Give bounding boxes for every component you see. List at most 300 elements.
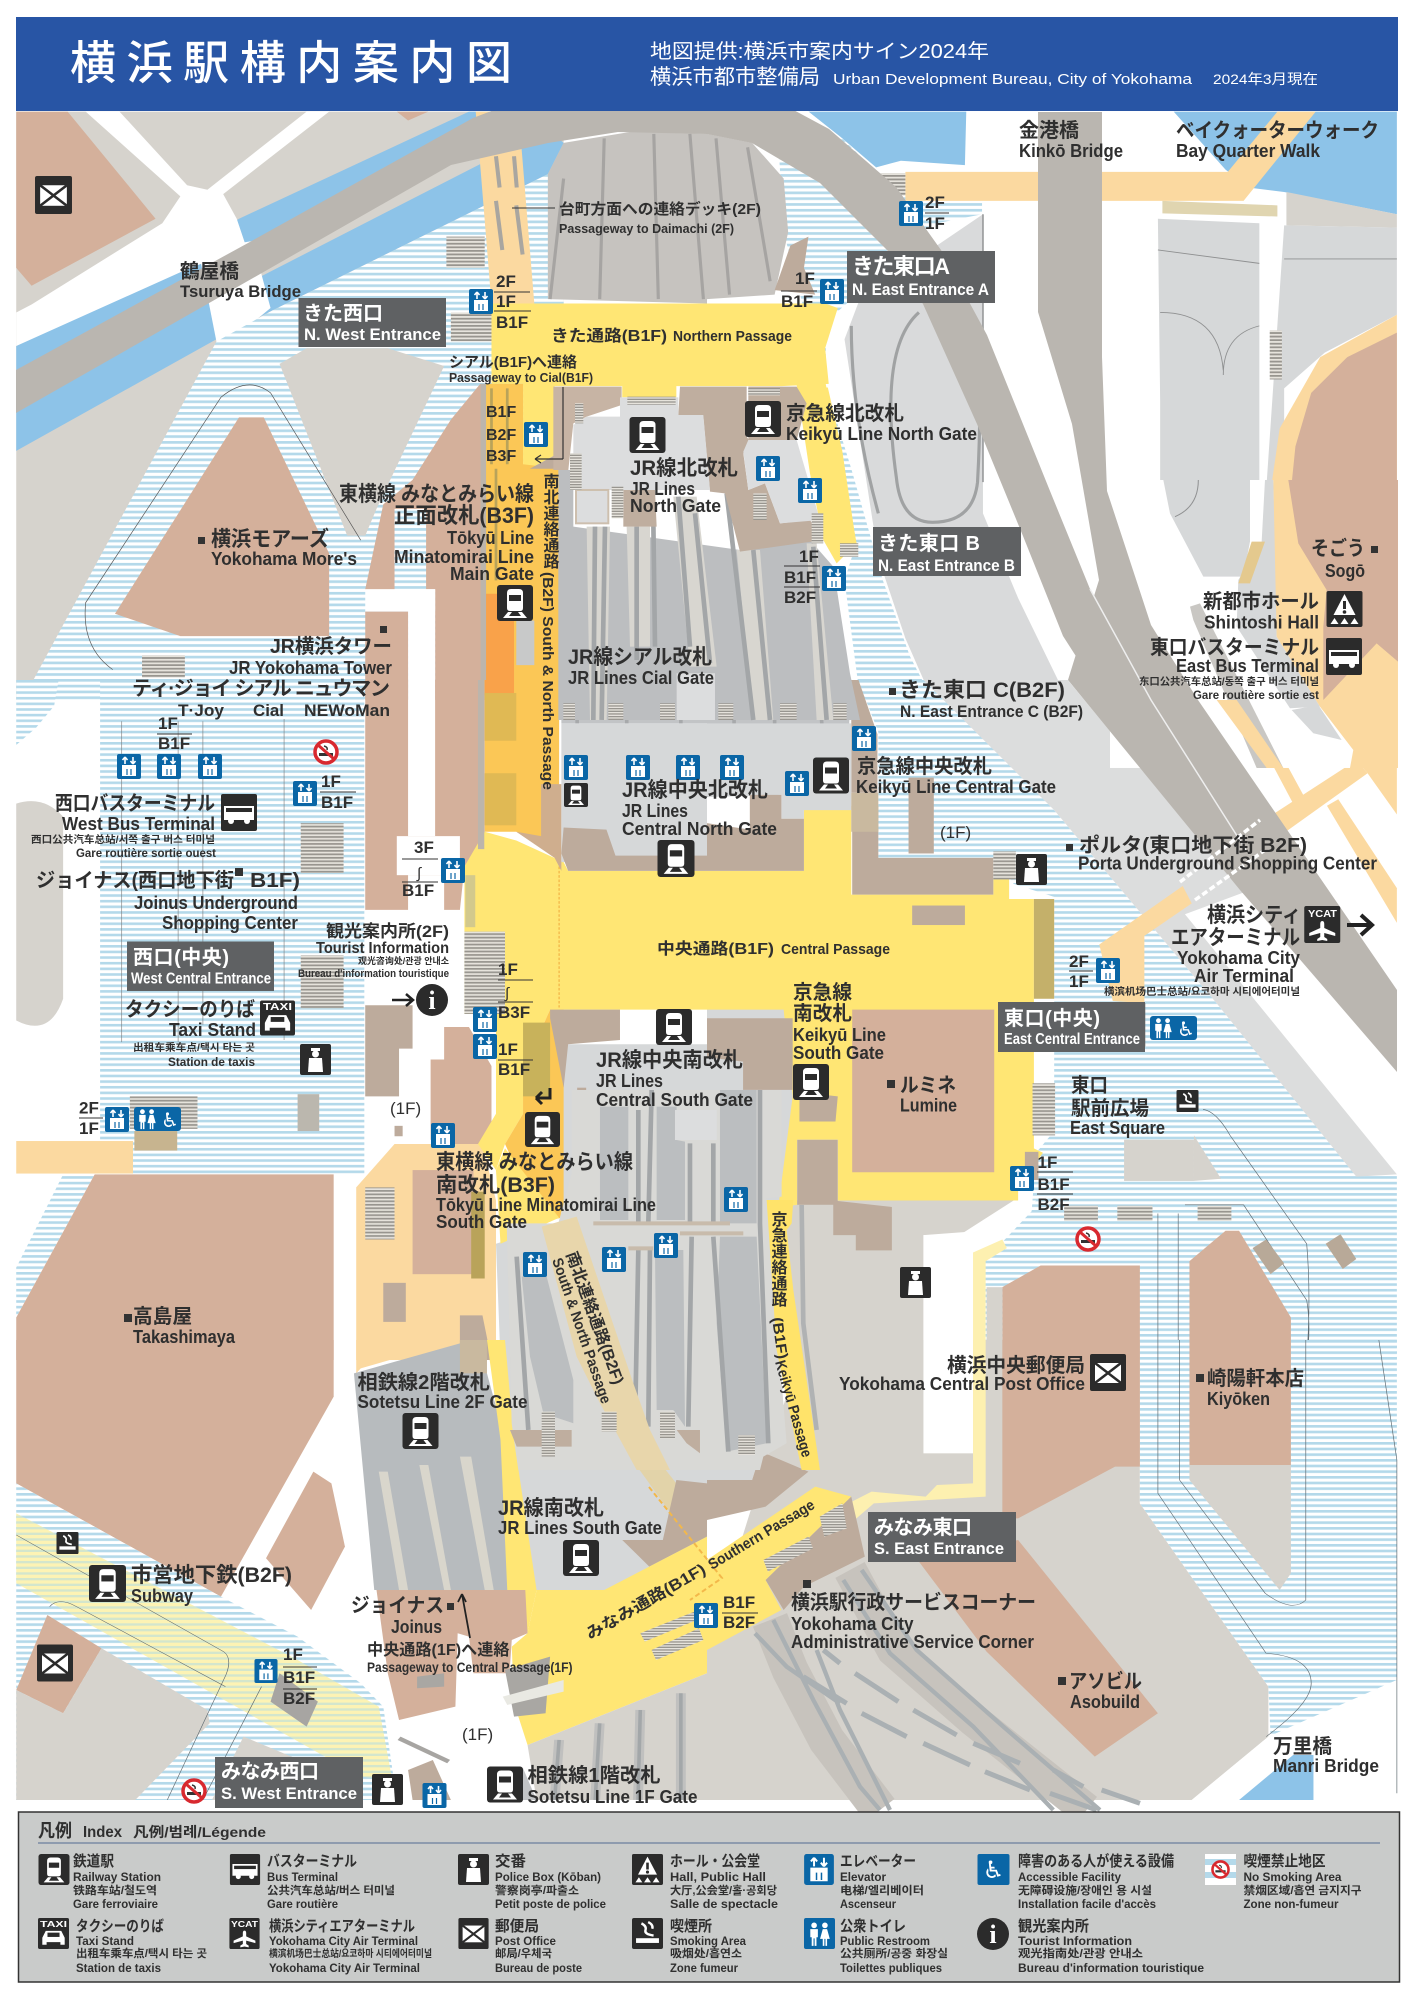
elevator with floors: B1F: [496, 313, 528, 332]
label: JR Yokohama Tower: JR Yokohama Tower: [229, 658, 392, 678]
header band: [16, 17, 1398, 111]
legend: no smoking area: 喫煙禁止地区: [1244, 1853, 1326, 1870]
southern passage east: [707, 1487, 851, 1650]
label: South and North Passage lower: 南北連絡通路(B2F): [562, 1249, 628, 1387]
map area: east central: [707, 680, 1397, 1361]
dashed walkway: [1180, 820, 1265, 900]
label: Tsuruya Bridge: [180, 260, 301, 301]
legend: post office: 邮局/우체국: [495, 1946, 552, 1960]
gate label: Tokyu Main Gate: Minatomirai Line: [394, 547, 534, 567]
label: Taxi Stand: Station de taxis: [168, 1055, 255, 1069]
entrance box: N. East B: きた東口 B: [878, 532, 980, 555]
label: West Bus Terminal: [31, 792, 257, 860]
label: Kinko Bridge: Kinkō Bridge: [1019, 141, 1123, 161]
orange decks east: [1363, 768, 1397, 814]
icon: no smoking east: [1077, 1228, 1099, 1250]
legend: tourist information: i: [989, 1920, 997, 1949]
legend: accessible facility: 障害のある人が使える設備: [1018, 1852, 1174, 1870]
elevator east 1F-B2F: B2F: [1038, 1195, 1070, 1214]
elevator with floors: 1F: [496, 292, 516, 311]
entrance box: N. West: きた西口: [303, 302, 383, 325]
gate label: JR North Gate: JR Lines: [630, 479, 695, 499]
gate label: JR Central South Gate: JR Lines: [596, 1071, 663, 1091]
label: Taxi Stand: 出租车乘车点/택시 타는 곳: [133, 1041, 255, 1054]
central passage west: [464, 832, 707, 1170]
elevators 1F-B3F and 1F-B1F: 1F: [498, 1040, 518, 1059]
label: Northern Passage: きた通路(B1F): [551, 326, 667, 345]
label: Central Post Office: Yokohama Central Post Office: [839, 1374, 1085, 1394]
legend panel: [18, 1812, 1400, 1982]
legend: hall: 大厅,公会堂/홀·공회당: [670, 1883, 777, 1897]
JR south block: [505, 1340, 707, 1590]
gate label: Sotetsu 1F: Sotetsu Line 1F Gate: [528, 1787, 698, 1807]
label: East Square: East Square: [1070, 1118, 1165, 1138]
legend: railway station: Gare ferroviaire: [73, 1897, 158, 1911]
label: Northern Passage: [551, 326, 792, 345]
label: Sogo: [1311, 536, 1378, 581]
title: 横浜駅構内案内図: [70, 37, 512, 89]
elevator with floors: [469, 272, 531, 332]
elevators 1F-B3F and 1F-B1F: B1F: [498, 1060, 530, 1079]
label: YCAT: 横滨机场巴士总站/요코하마 시티에어터미널: [1104, 985, 1300, 998]
elevator 2F-1F north east: 2F: [925, 193, 945, 212]
label: Passageway to Cial: シアル(B1F)へ連絡: [449, 353, 577, 371]
label: JR Yokohama Tower: JR横浜タワー: [270, 635, 392, 658]
label: Shintoshi Hall: 新都市ホール: [1203, 590, 1319, 613]
gate label: Tokyu Main Gate: 東横線 みなとみらい線: [339, 483, 534, 506]
legend heading: 凡例/범례/Légende: [133, 1824, 266, 1840]
label: Joinus Underground: [36, 868, 300, 933]
gate label: Tokyu Main Gate: Main Gate: [450, 564, 534, 584]
gate label: JR Central North Gate: JR Lines: [622, 801, 688, 821]
elevator 2F-1F north east: 1F: [925, 214, 945, 233]
legend: railway station: 铁路车站/철도역: [73, 1883, 157, 1897]
gate label: Keikyu North Gate: Keikyū Line North Gate: [786, 424, 977, 444]
label: East Bus Terminal: Gare routière sortie est: [1193, 688, 1319, 702]
label: Passageway to Cial: Passageway to Cial(B1F): [449, 370, 593, 385]
legend: police box: Police Box (Kōban): [495, 1870, 601, 1884]
map provider credit: 地図提供:横浜市案内サイン2024年: [650, 40, 989, 63]
label: Central Post Office: 横浜中央郵便局: [947, 1354, 1085, 1377]
label: South and North Passage B2F: 南北連絡通路: [540, 473, 560, 569]
icon: tourist information with arrow: i: [428, 986, 436, 1015]
gate label: Keikyu North Gate: [745, 401, 977, 444]
legend: accessible facility: Accessible Facility: [1018, 1870, 1121, 1884]
label: Keikyu Passage: [768, 1211, 815, 1459]
label: YCAT: [1104, 904, 1301, 998]
legend: taxi stand: タクシーのりば: [76, 1918, 164, 1935]
yellow north east: [707, 304, 838, 386]
entrance box: S. West: S. West Entrance: [221, 1784, 357, 1803]
label: Passageway to Daimachi: [512, 200, 761, 236]
central passage east: [707, 806, 1043, 1207]
label: Takashimaya: Takashimaya: [133, 1327, 236, 1347]
entrance box: N. West: N. West Entrance: [304, 325, 441, 344]
icon: YCAT with arrow: YCAT: [1308, 909, 1337, 920]
legend: accessible facility: Installation facile d'accès: [1018, 1897, 1156, 1911]
legend: police box: 交番: [495, 1853, 526, 1870]
label: West Bus Terminal: 西口公共汽车总站/서쪽 출구 버스 터미널: [31, 833, 215, 846]
label: Joinus Underground: B1F): [250, 870, 300, 892]
legend: public restroom: Public Restroom: [840, 1934, 930, 1948]
icon: YCAT with arrow: [1304, 906, 1372, 943]
gate label: Sotetsu 2F: [358, 1371, 528, 1449]
golden strip west: [484, 680, 560, 836]
legend: YCAT: [229, 1918, 432, 1975]
legend: railway station: 鉄道駅: [73, 1852, 114, 1870]
gate label: Keikyu South Gate: [793, 981, 886, 1100]
legend: YCAT: Yokohama City Air Terminal: [269, 1934, 418, 1948]
legend: tourist information: [977, 1917, 1204, 1975]
gate label: Keikyu Central Gate: [813, 755, 1056, 797]
legend: accessible facility: [978, 1852, 1174, 1911]
gate label: Keikyu South Gate: 南改札: [793, 1002, 852, 1025]
elevators Central North row: [564, 726, 876, 807]
label: YCAT: 横浜シティ: [1207, 904, 1301, 927]
label: Southern Passage JP: みなみ通路(B1F): [582, 1560, 709, 1643]
gate label: JR North Gate: JR線北改札: [630, 457, 738, 480]
legend: public restroom: [804, 1918, 948, 1975]
legend: no smoking area: No Smoking Area: [1244, 1870, 1342, 1884]
gate label: Keikyu Central Gate: Keikyū Line Central Gate: [856, 777, 1056, 797]
label: West Bus Terminal: Gare routière sortie ouest: [76, 846, 216, 860]
label: Tourist Information: 观光咨询处/관광 안내소: [358, 955, 449, 966]
icon: tourist information with arrow: [392, 984, 448, 1016]
legend: smoking area: Smoking Area: [670, 1934, 746, 1948]
light grey road loop: [845, 214, 1068, 700]
label: Lumine: [887, 1074, 957, 1116]
bay quarter deck: [905, 112, 1316, 201]
bus terminal east: [1158, 219, 1259, 491]
gate label: JR Cial Gate: JR Lines Cial Gate: [568, 668, 714, 688]
dotted passage link: [649, 1487, 722, 1600]
elevator 1F-B2F north east: B1F: [784, 568, 816, 587]
label: T-Joy Cial NEWoMan: ティ·ジョイ シアル ニュウマン: [132, 677, 390, 700]
legend: police box: Petit poste de police: [495, 1897, 606, 1911]
elevator west south: [431, 1123, 455, 1148]
JR north block interior: [553, 380, 860, 720]
entrance box: S. East: みなみ東口: [874, 1516, 972, 1539]
gate label: JR North Gate: [630, 417, 738, 516]
label: Passageway to Daimachi: 台町方面への連絡デッキ(2F): [559, 200, 761, 218]
gate label: Keikyu North Gate: 京急線北改札: [786, 402, 904, 425]
entrance box: S. West: [215, 1757, 363, 1808]
label: Asobuild: Asobuild: [1070, 1692, 1140, 1712]
JR central south west: [523, 1010, 566, 1222]
legend: hall: [632, 1853, 778, 1911]
elevator 1F-B2F north east: B2F: [784, 588, 816, 607]
label: Taxi Stand: [125, 998, 256, 1069]
icon: police west: [300, 1044, 331, 1075]
label: West Bus Terminal: 西口バスターミナル: [55, 792, 215, 815]
gate label: JR Central South Gate: Central South Gate: [596, 1090, 753, 1110]
gate label: Sotetsu 1F: [487, 1764, 698, 1807]
label: Passageway to Daimachi: Passageway to Daimachi (2F): [559, 221, 734, 236]
legend: elevator: エレベーター: [840, 1853, 916, 1870]
elevator 1F-B1F north east: 1F: [795, 269, 815, 288]
legend: police box: 警察岗亭/파출소: [495, 1883, 579, 1897]
entrance box: N. East B: [873, 527, 1021, 576]
gate label: JR South Gate: [498, 1497, 662, 1576]
legend: smoking area: 喫煙所: [670, 1918, 712, 1935]
level note (1F) west: (1F): [390, 1099, 421, 1118]
entrance box: N. East B: N. East Entrance B: [878, 556, 1015, 575]
label: Tourist Information: [298, 921, 449, 980]
label: Passageway to Central Passage: Passageway to Central Passage(1F): [367, 1659, 572, 1675]
elevator west 1F-B1F: B1F: [321, 793, 353, 812]
elevators 1F-B3F and 1F-B1F: ∫: [504, 985, 511, 1002]
label: South and North Passage B2F: (B2F) South & North Passage: [539, 572, 556, 790]
level note (1F) south: (1F): [462, 1725, 493, 1744]
elevator 1F-B1F north east: B1F: [781, 292, 813, 311]
entrance box: S. West: みなみ西口: [221, 1760, 319, 1783]
label: Joinus Underground: ジョイナス(西口地下街: [36, 869, 234, 892]
bureau name english: Urban Development Bureau, City of Yokohama: [833, 71, 1193, 88]
elevator west 1F-B1F: [293, 772, 356, 812]
label: Administrative Service Corner: [791, 1580, 1036, 1652]
icon: taxi: [260, 1000, 295, 1036]
label: Taxi Stand: Taxi Stand: [169, 1020, 256, 1040]
label: Tourist Information: 観光案内所(2F): [326, 921, 449, 941]
label: East Bus Terminal: [1139, 636, 1362, 702]
elevator southern passage: [694, 1593, 758, 1632]
legend: taxi stand: TAXI: [40, 1920, 67, 1929]
legend: accessible facility: ♿: [983, 1856, 1004, 1884]
sotetsu 2F: [356, 1340, 390, 1373]
label: Takashimaya: 高島屋: [133, 1305, 192, 1328]
gate label: Keikyu South Gate: 京急線: [793, 981, 852, 1004]
legend: YCAT: Yokohama City Air Terminal: [269, 1961, 420, 1975]
icon: no smoking south west: [183, 1780, 205, 1802]
elevator east 2F-1F: [1069, 952, 1120, 991]
legend: smoking area: Zone fumeur: [670, 1961, 738, 1975]
label: N. East Entrance C: N. East Entrance C (B2F): [900, 702, 1083, 721]
legend: post office: Post Office: [495, 1934, 556, 1948]
legend: YCAT: YCAT: [231, 1920, 258, 1929]
legend: no smoking area: 禁烟区域/흡연 금지지구: [1244, 1883, 1362, 1897]
gate label: Keikyu South Gate: South Gate: [793, 1043, 884, 1063]
entrance box: West Central: [127, 942, 274, 991]
label: T-Joy Cial NEWoMan: NEWoMan: [304, 701, 390, 720]
label: Sogo: そごう: [1311, 536, 1365, 560]
sogo: [1271, 315, 1397, 491]
elevator with floors B1F-B3F: B2F: [486, 427, 516, 444]
label: T-Joy Cial NEWoMan: [132, 677, 390, 720]
gate label: Keikyu Central Gate: 京急線中央改札: [857, 755, 992, 778]
entrance box: East Central: 東口(中央): [1004, 1007, 1100, 1030]
elevator southern passage: B2F: [723, 1613, 755, 1632]
elevator west 2F-1F with restroom: [79, 1098, 181, 1138]
gate label: Tokyu Main Gate: Tōkyū Line: [447, 528, 534, 548]
elevators south block: [523, 1187, 748, 1277]
label: Administrative Service Corner: 横浜駅行政サービスコーナー: [791, 1591, 1036, 1614]
elevator south: [422, 1783, 446, 1808]
entrance box: S. East: [868, 1512, 1016, 1562]
legend: post office: 郵便局: [495, 1918, 539, 1935]
legend: tourist information: 观光指南处/관광 안내소: [1018, 1946, 1143, 1960]
level note (1F) east: (1F): [940, 823, 971, 842]
label: Porta: ポルタ(東口地下街 B2F): [1079, 834, 1307, 857]
label: Passageway to Central Passage: [367, 1640, 572, 1675]
elevator 3F-B1F: ∫: [416, 865, 423, 882]
label: Administrative Service Corner: Yokohama City: [791, 1614, 914, 1634]
label: Tsuruya Bridge: 鶴屋橋: [180, 260, 239, 283]
legend: bus terminal: Bus Terminal: [267, 1870, 338, 1884]
gate label: Sotetsu 1F: 相鉄線1階改札: [528, 1764, 660, 1787]
legend: railway station: [38, 1852, 161, 1911]
legend: accessible facility: 无障碍设施/장애인 용 시설: [1018, 1883, 1152, 1897]
label: Southern Passage EN: Southern Passage: [705, 1497, 818, 1573]
legend: taxi stand: 出租车乘车点/택시 타는 곳: [76, 1946, 207, 1960]
legend heading: Index: [83, 1824, 122, 1841]
label: Administrative Service Corner: Administrative Service Corner: [791, 1632, 1034, 1652]
icon: smoking east: [1176, 1090, 1198, 1112]
elevator subway 1F-B2F: B1F: [283, 1668, 315, 1687]
legend: public restroom: Toilettes publiques: [840, 1961, 942, 1975]
gate label: JR Central South Gate: JR線中央南改札: [596, 1049, 743, 1072]
elevator east 1F-B2F: [1010, 1153, 1073, 1214]
gate label: Tokyu South Gate: South Gate: [436, 1212, 527, 1232]
legend: post office: Bureau de poste: [495, 1961, 582, 1975]
label: T-Joy Cial NEWoMan: Cial: [253, 701, 284, 720]
legend: tourist information: Tourist Information: [1018, 1934, 1132, 1948]
legend: smoking area: 吸烟处/흡연소: [670, 1946, 742, 1960]
gate label: JR South Gate: JR Lines South Gate: [498, 1518, 662, 1538]
legend: police box: [458, 1853, 606, 1911]
entrance box: N. East A: N. East Entrance A: [852, 280, 989, 299]
legend: bus terminal: 公共汽车总站/버스 터미널: [267, 1883, 395, 1897]
label: West Bus Terminal: West Bus Terminal: [62, 814, 215, 834]
label: Kiyoken: 崎陽軒本店: [1207, 1367, 1304, 1390]
rail lines south east: [755, 1570, 1140, 1810]
label: Bay Quarter Walk: ベイクォーターウォーク: [1176, 119, 1379, 142]
elevator with floors B1F-B3F: B1F: [486, 404, 516, 421]
elevator 1F-B2F north east: 1F: [799, 547, 819, 566]
gate label: Tokyu South Gate: Tōkyū Line Minatomirai Line: [436, 1195, 656, 1215]
label: Kiyoken: Kiyōken: [1207, 1389, 1270, 1409]
label: Central Passage: [657, 939, 890, 958]
legend heading: [38, 1821, 266, 1841]
east bus terminal and Sogo detail: [1110, 480, 1398, 768]
label: East Bus Terminal: 東口バスターミナル: [1150, 636, 1319, 659]
map area: south west: [16, 1340, 707, 1800]
gate label: Tokyu South Gate: [436, 1088, 656, 1232]
map area: south east: [707, 1340, 1397, 1800]
legend: taxi stand: Station de taxis: [76, 1961, 161, 1975]
elevator subway 1F-B2F: B2F: [283, 1689, 315, 1708]
label: South and North Passage lower: South & North Passage: [548, 1256, 614, 1406]
label: Central Passage: Central Passage: [781, 941, 890, 958]
label: Joinus: Joinus: [391, 1617, 442, 1637]
gate label: JR North Gate: North Gate: [630, 496, 721, 516]
label: Takashimaya: [124, 1305, 236, 1347]
legend: no smoking area: Zone non-fumeur: [1244, 1897, 1339, 1911]
label: Joinus Underground: Shopping Center: [162, 913, 298, 933]
icon: police east: [1016, 854, 1047, 885]
legend: YCAT: 横滨机场巴士总站/요코하마 시티에어터미널: [269, 1947, 432, 1960]
elevators 1F-B3F and 1F-B1F: [473, 960, 533, 1079]
label: Keikyu Passage: 京急連絡通路: [768, 1211, 788, 1307]
elevated expressway: vertical band: [1038, 112, 1397, 1072]
entrance box: West Central: West Central Entrance: [131, 970, 271, 988]
label: Keikyu Passage: Keikyū Passage: [771, 1358, 815, 1459]
icon: smoking south west: [56, 1532, 78, 1554]
legend: bus terminal: [230, 1853, 395, 1911]
north passage yellow: [491, 304, 707, 469]
elevator east 1F-B2F: B1F: [1038, 1175, 1070, 1194]
legend: elevator: 电梯/엘리베이터: [840, 1883, 924, 1897]
gate label: JR Central North Gate: JR線中央北改札: [622, 779, 768, 802]
label: N. East Entrance C: きた東口 C(B2F): [899, 679, 1065, 702]
rails south: [528, 1673, 707, 1800]
gate label: Tokyu South Gate: 東横線 みなとみらい線: [436, 1151, 633, 1174]
elevator with floors: 2F: [496, 272, 516, 291]
label: East Bus Terminal: 东口公共汽车总站/동쪽 출구 버스 터미널: [1139, 675, 1319, 688]
entrance box: N. East A: [847, 251, 995, 303]
legend: no smoking area: [1205, 1853, 1362, 1911]
elevators west plaza: [117, 714, 222, 779]
label: East Bus Terminal: East Bus Terminal: [1176, 656, 1319, 676]
rails south east: [707, 1470, 755, 1480]
label: YCAT: Air Terminal: [1194, 966, 1294, 986]
elevators 1F-B3F and 1F-B1F: 1F: [498, 960, 518, 979]
elevator with floors B1F-B3F: [486, 387, 563, 465]
label: Manri Bridge: [1273, 1735, 1379, 1776]
gate label: Sotetsu 2F: Sotetsu Line 2F Gate: [358, 1392, 528, 1412]
east buildings: [909, 778, 934, 853]
gate label: JR Central South Gate: [596, 1009, 753, 1110]
joinus building: [377, 1590, 528, 1720]
entrance box: West Central: 西口(中央): [133, 946, 229, 969]
elevator subway 1F-B2F: [254, 1645, 317, 1708]
label: Joinus: [351, 1595, 454, 1637]
south and north passage: [485, 384, 561, 700]
elevator west 1F-B1F: 1F: [321, 772, 341, 791]
elevator 3F-B1F: B1F: [402, 881, 434, 900]
JR central south east: [707, 1010, 793, 1200]
label: East Square: 東口: [1071, 1074, 1108, 1097]
legend: smoking area: [632, 1918, 746, 1975]
label: Northern Passage: Northern Passage: [673, 328, 792, 345]
label: Kinko Bridge: 金港橋: [1019, 119, 1079, 142]
elevator east 1F-B2F: 1F: [1038, 1153, 1057, 1172]
buildings: [365, 680, 408, 910]
label: Shintoshi Hall: [1203, 590, 1362, 632]
label: East Square: [1070, 1074, 1165, 1138]
entrance box: East Central: [998, 1002, 1145, 1052]
elevator 3F-B1F: 3F: [414, 838, 434, 857]
yellow strip south: [487, 1340, 537, 1640]
JR central north west: [561, 720, 707, 724]
label: T-Joy Cial NEWoMan: T·Joy: [178, 701, 225, 720]
legend: bus terminal: Gare routière: [267, 1897, 338, 1911]
legend: elevator: [804, 1853, 924, 1911]
label: Taxi Stand: タクシーのりば: [125, 998, 255, 1021]
label: YCAT: エアターミナル: [1171, 926, 1300, 950]
entrance box: N. West: [298, 298, 446, 347]
icon: restroom and accessible east: ♿: [1177, 1017, 1195, 1041]
label: Subway: Subway: [131, 1586, 193, 1606]
label: Porta: [1066, 834, 1377, 874]
label: Tourist Information: Tourist Information: [316, 940, 449, 957]
label: Yokohama More's: [198, 527, 357, 569]
label: Central Post Office: [839, 1354, 1126, 1394]
legend: elevator: Elevator: [840, 1870, 886, 1884]
elevator west 2F-1F with restroom: 2F: [79, 1098, 99, 1118]
elevator west 2F-1F with restroom: ♿: [161, 1108, 179, 1132]
label: Sogo: Sogō: [1325, 561, 1365, 581]
arrow: to central passage: [458, 1594, 470, 1638]
